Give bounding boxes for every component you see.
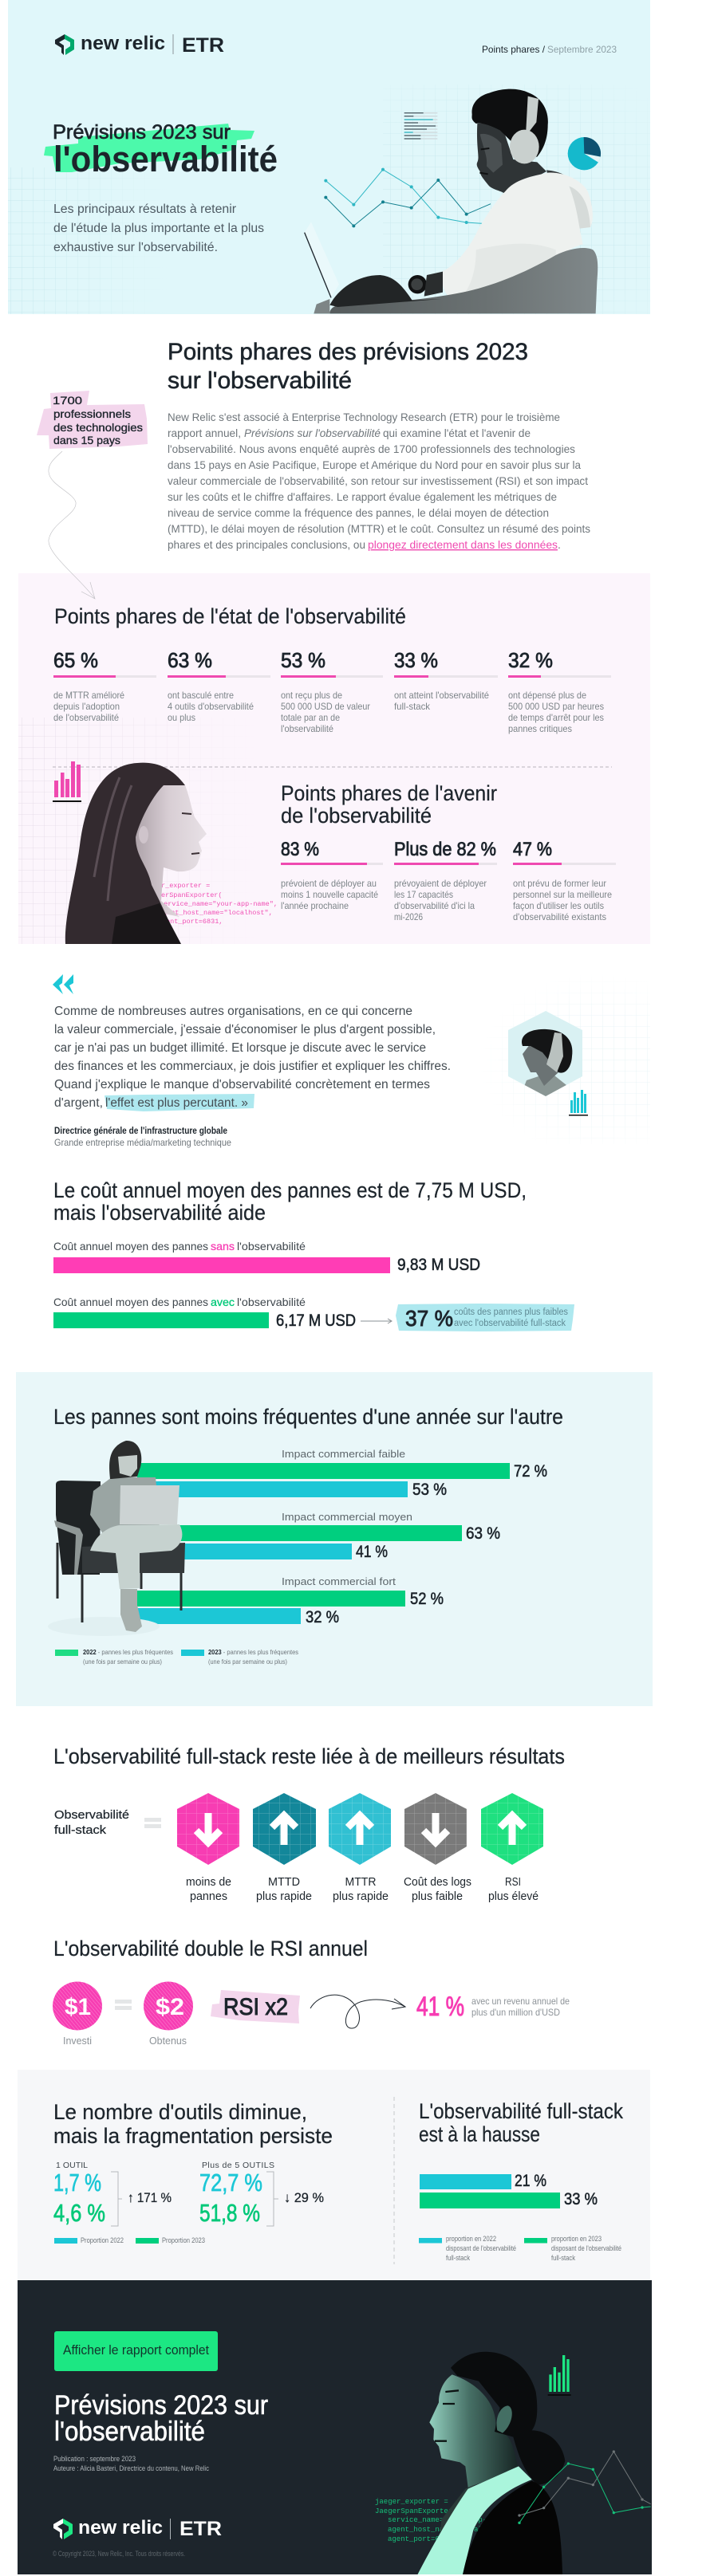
- publication details: [53, 2455, 209, 2473]
- legend: full-stack: disposant de l'observabilité: [446, 2244, 516, 2252]
- date label: [482, 44, 617, 55]
- stat: 32 %: pannes critiques: [508, 723, 572, 734]
- arrow: [361, 1319, 392, 1323]
- panel: outage frequency: [16, 1372, 653, 1706]
- callout: 37 %: avec l'observabilité full-stack: [454, 1319, 566, 1328]
- stat: 33 %: ont atteint l'observabilité: [394, 690, 489, 701]
- code snippet: footer: [375, 2498, 513, 2543]
- code snippet: erSpanExporter(: [161, 891, 223, 899]
- stat: 53 %: l'observabilité: [281, 723, 333, 734]
- hexagon: lower log cost: plus faible: [412, 1890, 463, 1903]
- heading: cost: mais l'observabilité aide: [53, 1201, 266, 1225]
- bar: with observability: avec: [211, 1296, 235, 1308]
- heading: future: Points phares de l'avenir: [281, 781, 497, 805]
- quote text: Quand j'explique le manque d'observabilité concrètement en termes: [54, 1078, 430, 1091]
- hexagon: fewer outages: moins de: [186, 1876, 231, 1889]
- quote text: car je n'ai pas un budget illimité. Et lorsque je discute avec le service: [54, 1041, 426, 1055]
- quote text: l'effet est plus percutant. »: [105, 1096, 248, 1110]
- stat: more than five tools: ↓ 29 %: [284, 2190, 324, 2205]
- panel: tools and full-stack growth: [18, 2070, 650, 2280]
- code snippet: gent_host_name="localhost",: [163, 909, 273, 917]
- stat: 32 %: de temps d'arrêt pour les: [508, 712, 604, 723]
- stat: one tool: 4,6 %: [53, 2199, 105, 2227]
- hexagon: faster MTTD: MTTD: [268, 1876, 300, 1889]
- hexagon: faster MTTD: [253, 1793, 316, 1903]
- stat: 65 %: de MTTR amélioré: [53, 690, 124, 701]
- callout: 1700 professionals: dans 15 pays: [53, 434, 120, 446]
- heading: cost: Le coût annuel moyen des pannes est de 7,75 M USD,: [53, 1178, 527, 1202]
- body text: Prévisions sur l'observabilité: [244, 427, 381, 439]
- stat: 63 %: ont basculé entre: [168, 690, 234, 701]
- stat: one tool: 1,7 %: [53, 2169, 101, 2196]
- hexagon: faster MTTR: MTTR: [345, 1876, 377, 1889]
- legend: 2022 and 2023: 2023 - pannes les plus fréquentes: [208, 1648, 298, 1656]
- callout: 37 %: 37 %: [405, 1306, 453, 1331]
- portrait in hexagon: [508, 1011, 582, 1100]
- button: Afficher le rapport complet: [63, 2342, 209, 2358]
- hexagon: higher ROI: plus élevé: [488, 1890, 538, 1903]
- stat: 47 %: d'observabilité existants: [513, 911, 606, 922]
- quote attribution: Grande entreprise média/marketing technique: [54, 1137, 231, 1148]
- publication details: Auteure : Alicia Basteri, Directrice du contenu, New Relic: [53, 2464, 209, 2473]
- stat: plus de 82 %: d'observabilité d'ici la: [394, 900, 475, 911]
- legend: 2022 and 2023: (une fois par semaine ou plus): [208, 1658, 287, 1666]
- bar group: high impact: 52 %: [410, 1590, 444, 1608]
- callout: RSI x2: RSI x2: [223, 1994, 288, 2020]
- stat: one tool: ↑ 171 %: [128, 2190, 172, 2205]
- body text: New Relic s'est associé à Enterprise Technology Research (ETR) pour le troisième: [168, 411, 560, 423]
- bar group: low impact: [137, 1448, 547, 1499]
- stat: 53 %: 53 %: [281, 648, 325, 672]
- legend: 2022 and 2023: [55, 1648, 298, 1666]
- heading: highlights: sur l'observabilité: [168, 368, 352, 394]
- heading: highlights: [168, 339, 528, 394]
- stat: one tool: 1 OUTIL: [56, 2161, 88, 2170]
- bar: without observability: sans: [211, 1240, 235, 1253]
- stat: 47 %: [513, 839, 616, 922]
- stat: 65 %: depuis l'adoption: [53, 701, 120, 712]
- stat: more than five tools: [199, 2161, 324, 2227]
- stat: 33 %: full-stack: [394, 701, 431, 712]
- stat: 32 %: [508, 648, 611, 734]
- callout: RSI x2: [211, 1990, 300, 2023]
- legend: tools: Proportion 2023: [162, 2236, 205, 2245]
- stat: 33 %: [394, 648, 498, 712]
- circle: $2 obtained: [144, 1982, 193, 2047]
- stat: 32 %: 500 000 USD par heures: [508, 701, 604, 712]
- quote text: Comme de nombreuses autres organisations, en ce qui concerne: [54, 1005, 412, 1018]
- subtitle: [53, 203, 264, 254]
- footer title: l'observabilité: [54, 2417, 205, 2447]
- heading: future: [281, 781, 497, 828]
- callout: 37 %: coûts des pannes plus faibles: [454, 1308, 568, 1317]
- circle: $1 invested: $1: [65, 1994, 91, 2020]
- heading: future: de l'observabilité: [281, 804, 432, 828]
- stat: 65 %: [53, 648, 156, 723]
- heading: ROI: L'observabilité double le RSI annuel: [53, 1937, 368, 1961]
- hexagon: faster MTTR: [329, 1793, 391, 1903]
- photo: woman in profile: [65, 763, 207, 944]
- stat: 41 %: avec un revenu annuel de: [471, 1996, 570, 2007]
- code snippet: footer: agent_host_name="localhost",: [388, 2526, 508, 2534]
- code snippet: footer: jaeger_exporter =: [375, 2498, 448, 2506]
- illustration: man with headphones and charts: [305, 89, 601, 313]
- stat: 65 %: de l'observabilité: [53, 712, 119, 723]
- title: l'observabilité: [53, 139, 278, 179]
- hexagon: higher ROI: [481, 1793, 543, 1903]
- heading: cost: [53, 1178, 527, 1225]
- label: full-stack observability: Observabilité: [54, 1808, 129, 1822]
- heading: tools: [53, 2100, 333, 2148]
- stat: 53 %: totale par an de: [281, 712, 340, 723]
- stat: plus de 82 %: les 17 capacités: [394, 889, 453, 900]
- bar: without observability: Coût annuel moyen des pannes: [53, 1240, 208, 1253]
- legend: full-stack: proportion en 2023: [551, 2235, 602, 2243]
- heading: full-stack: L'observabilité full-stack reste liée à de meilleurs résultats: [53, 1744, 565, 1768]
- body text: (MTTD), le délai moyen de résolution (MTTR) et le coût. Consultez un résumé des points: [168, 522, 590, 535]
- stat: more than five tools: 72,7 %: [199, 2169, 262, 2196]
- legend: tools: Proportion 2022: [81, 2236, 124, 2245]
- stat: 47 %: 47 %: [513, 839, 552, 860]
- callout: 1700 professionals: 1700: [53, 394, 82, 407]
- legend: tools: [54, 2236, 205, 2245]
- hexagon: higher ROI: RSI: [505, 1876, 521, 1889]
- line chart: [324, 168, 491, 227]
- heading: tools: mais la fragmentation persiste: [53, 2124, 333, 2148]
- stat: 47 %: personnel sur la meilleure: [513, 889, 612, 900]
- bar group: low impact: 72 %: [514, 1462, 547, 1481]
- stat: 63 %: [168, 648, 270, 723]
- quote text: des finances et les commerciaux, je dois justifier et expliquer les chiffres.: [54, 1060, 451, 1073]
- body text: .: [558, 538, 561, 551]
- hexagon: faster MTTR: plus rapide: [333, 1890, 389, 1903]
- stat: more than five tools: Plus de 5 OUTILS: [202, 2161, 274, 2170]
- bar group: high impact: Impact commercial fort: [282, 1575, 396, 1587]
- quote highlight: [105, 1094, 254, 1111]
- bar: without observability: l'observabilité: [237, 1240, 306, 1253]
- logo: new relic and ETR: [55, 33, 224, 57]
- footer title: Prévisions 2023 sur: [54, 2390, 268, 2421]
- code snippet: service_name="your-app-name",: [160, 900, 278, 908]
- stat: 33 %: 33 %: [394, 648, 438, 672]
- stat: 63 %: 4 outils d'observabilité: [168, 701, 254, 712]
- equals sign: [115, 2000, 132, 2010]
- person: [314, 89, 598, 313]
- heading: full-stack rising: [419, 2099, 623, 2146]
- body text: qui examine l'état et l'avenir de: [383, 427, 531, 439]
- hexagon: lower log cost: Coût des logs: [404, 1876, 471, 1889]
- stat: 83 %: 83 %: [281, 839, 319, 860]
- heading: full-stack rising: est à la hausse: [419, 2122, 540, 2146]
- stat: 47 %: façon d'utiliser les outils: [513, 900, 604, 911]
- stat: 65 %: 65 %: [53, 648, 98, 672]
- body text: sur les coûts et le chiffre d'affaires. Le rapport évalue également les métriques de: [168, 490, 557, 503]
- title: Prévisions 2023 sur: [53, 121, 231, 144]
- bar: with observability: Coût annuel moyen des pannes: [53, 1296, 208, 1308]
- body text: niveau de service comme la fréquence des pannes, le délai moyen de détection: [168, 506, 549, 519]
- bar: without observability: [53, 1240, 480, 1274]
- stat: 53 %: ont reçu plus de: [281, 690, 342, 701]
- callout: 1700 professionals: des technologies: [53, 421, 143, 434]
- body text: valeur commerciale de l'observabilité, son retour sur investissement (RSI) et son impact: [168, 474, 588, 487]
- code snippet: r_exporter =: [161, 882, 210, 890]
- bar group: low impact: Impact commercial faible: [282, 1448, 405, 1460]
- stat: 63 %: 63 %: [168, 648, 212, 672]
- code snippet: footer: service_name="your-app-name",: [388, 2516, 513, 2524]
- bar group: medium impact: 41 %: [356, 1543, 388, 1561]
- arrow: curly: [310, 1995, 405, 2028]
- stat: 83 %: prévoient de déployer au: [281, 878, 377, 889]
- logo: footer: [53, 2517, 222, 2540]
- pie chart: [568, 137, 601, 170]
- circle: $2 obtained: $2: [156, 1994, 184, 2020]
- panel: state and future of observability: [18, 573, 650, 944]
- bar: with observability: [53, 1296, 356, 1330]
- code snippet: footer: agent_port=6831,: [388, 2535, 456, 2543]
- date label: Points phares /: [482, 44, 546, 55]
- section: ROI: [53, 1937, 570, 2047]
- logo: footer: new relic: [78, 2517, 163, 2539]
- icon: pink bars: [53, 761, 81, 802]
- heading: full-stack rising: L'observabilité full-stack: [419, 2099, 623, 2123]
- callout: 1700 professionals: [37, 391, 148, 449]
- stat: 41 %: 41 %: [416, 1992, 464, 2022]
- bar group: high impact: [131, 1575, 444, 1626]
- legend: 2022 and 2023: (une fois par semaine ou plus): [83, 1658, 162, 1666]
- date label: Septembre 2023: [547, 44, 617, 55]
- label: full-stack observability: [54, 1808, 129, 1837]
- stat: plus de 82 %: Plus de 82 %: [394, 839, 496, 860]
- circle: $1 invested: Investi: [63, 2035, 92, 2047]
- bar chart: full-stack share: [420, 2172, 598, 2208]
- section: full-stack results: [53, 1744, 565, 1903]
- copyright: © Copyright 2023, New Relic, Inc. Tous droits réservés.: [53, 2550, 185, 2558]
- panel: footer: [18, 2280, 652, 2574]
- quote attribution: [54, 1125, 231, 1148]
- publication details: Publication : septembre 2023: [53, 2455, 136, 2464]
- stat: 83 %: l'année prochaine: [281, 900, 349, 911]
- stat: 83 %: moins 1 nouvelle capacité: [281, 889, 378, 900]
- photo: person on armchair with laptop: [48, 1441, 185, 1636]
- hexagon: fewer outages: [177, 1793, 239, 1903]
- quote text: la valeur commerciale, j'essaie d'économiser le plus d'argent possible,: [54, 1023, 436, 1036]
- circle: $1 invested: [53, 1982, 102, 2047]
- legend: full-stack: full-stack: [446, 2254, 470, 2262]
- stat: 83 %: [281, 839, 383, 911]
- stat: plus de 82 %: mi-2026: [394, 911, 423, 922]
- bar group: medium impact: Impact commercial moyen: [282, 1511, 412, 1523]
- bar: without observability: 9,83 M USD: [397, 1256, 480, 1274]
- legend: full-stack: proportion en 2022: [446, 2235, 496, 2243]
- equals sign: [144, 1818, 161, 1828]
- button: [54, 2331, 218, 2371]
- panel: quote: [53, 973, 650, 1148]
- body text: [168, 411, 590, 551]
- stat: 32 %: 32 %: [508, 648, 553, 672]
- bar group: medium impact: [176, 1511, 500, 1561]
- circle: $2 obtained: Obtenus: [149, 2035, 187, 2047]
- hexagon: lower log cost: [404, 1793, 471, 1903]
- logo: footer: ETR: [180, 2518, 222, 2540]
- code snippet: footer: JaegerSpanExporter(: [375, 2507, 457, 2515]
- photo: woman with ponytail and charts: [417, 2352, 651, 2574]
- subtitle: exhaustive sur l'observabilité.: [53, 241, 218, 254]
- legend: full-stack: full-stack: [551, 2254, 575, 2262]
- icon: quote marks: [53, 974, 73, 994]
- mini table: [404, 112, 437, 140]
- legend: full-stack: [419, 2235, 621, 2262]
- heading: highlights: Points phares des prévisions 2023: [168, 339, 528, 365]
- body text: rapport annuel,: [168, 427, 241, 439]
- callout: 1700 professionals: professionnels: [53, 407, 131, 420]
- heading: state: Points phares de l'état de l'observabilité: [54, 604, 406, 628]
- stat: 53 %: 500 000 USD de valeur: [281, 701, 370, 712]
- stat: more than five tools: 51,8 %: [199, 2199, 260, 2227]
- code snippet: ent_port=6831,: [166, 918, 223, 926]
- section: annual cost of outages: [53, 1178, 574, 1331]
- heading: tools: Le nombre d'outils diminue,: [53, 2100, 307, 2124]
- quote text: d'argent,: [54, 1096, 103, 1110]
- stat: 53 %: [281, 648, 383, 734]
- laptop: [305, 222, 339, 297]
- icon: teal bars: [569, 1090, 588, 1116]
- quote attribution: Directrice générale de l'infrastructure globale: [54, 1125, 227, 1136]
- stat: plus de 82 %: prévoyaient de déployer: [394, 878, 487, 889]
- body text: phares et des principales conclusions, ou: [168, 538, 365, 551]
- code snippet: [160, 882, 278, 926]
- heading: outages: Les pannes sont moins fréquentes d'une année sur l'autre: [53, 1405, 563, 1429]
- stat: 32 %: ont dépensé plus de: [508, 690, 586, 701]
- panel: hero: [8, 0, 650, 314]
- footer title: [54, 2390, 268, 2447]
- label: full-stack observability: full-stack: [54, 1823, 107, 1837]
- stat: 41 %: [416, 1992, 570, 2022]
- title: [53, 121, 278, 179]
- body text: plongez directement dans les données: [368, 538, 558, 551]
- quote text: [54, 1005, 451, 1110]
- bar: with observability: l'observabilité: [237, 1296, 306, 1308]
- logo: new relic and ETR: new relic: [81, 33, 165, 54]
- stat: one tool: [53, 2161, 172, 2227]
- hexagon: faster MTTD: plus rapide: [256, 1890, 312, 1903]
- icon: green bars: [548, 2355, 571, 2396]
- bar group: low impact: 53 %: [412, 1481, 447, 1499]
- subtitle: de l'étude la plus importante et la plus: [53, 222, 264, 235]
- legend: 2022 and 2023: 2022 - pannes les plus fréquentes: [83, 1648, 173, 1656]
- bar group: medium impact: 63 %: [466, 1524, 500, 1543]
- arrow: squiggle from callout: [49, 451, 95, 599]
- bar group: high impact: 32 %: [306, 1608, 339, 1626]
- body text: dans 15 pays en Asie Pacifique, Europe et Amérique du Nord pour en savoir plus sur la: [168, 458, 581, 471]
- legend: full-stack: disposant de l'observabilité: [551, 2244, 621, 2252]
- stat: 41 %: plus d'un million d'USD: [471, 2007, 560, 2018]
- body text: l'observabilité. Nous avons enquêté auprès de 1700 professionnels des technologies: [168, 442, 575, 455]
- subtitle: Les principaux résultats à retenir: [53, 203, 236, 216]
- bar chart: full-stack share: 21 %: [515, 2172, 546, 2190]
- stat: plus de 82 %: [394, 839, 497, 922]
- stat: 47 %: ont prévu de former leur: [513, 878, 606, 889]
- logo: new relic and ETR: ETR: [182, 34, 224, 57]
- bar: with observability: 6,17 M USD: [276, 1312, 356, 1330]
- hexagon: fewer outages: pannes: [190, 1890, 227, 1903]
- title highlight: [44, 124, 254, 172]
- bar chart: full-stack share: 33 %: [564, 2190, 598, 2208]
- callout: 37 %: [396, 1304, 574, 1331]
- line charts: [519, 2452, 651, 2523]
- stat: 63 %: ou plus: [168, 712, 195, 723]
